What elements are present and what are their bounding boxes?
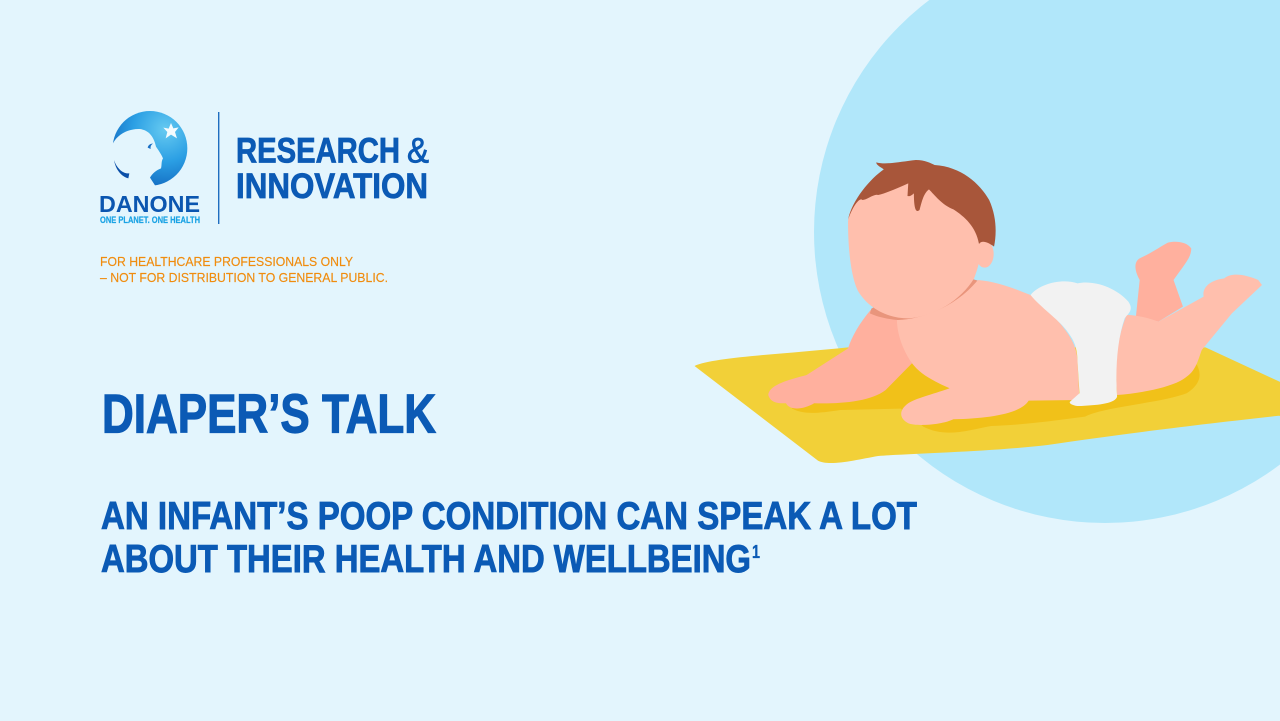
background circle: [814, 0, 1280, 523]
subtitle: [101, 495, 917, 581]
logo emblem: [105, 111, 187, 190]
yellow mat: [695, 347, 1280, 463]
mat shadow: [792, 363, 1200, 433]
far leg: [1135, 242, 1191, 322]
title: DIAPER’S TALK: [102, 382, 436, 444]
logo divider: [218, 112, 219, 224]
near leg: [1116, 275, 1262, 395]
heading: research and innovation: &: [407, 132, 429, 170]
Danone logo: [99, 111, 200, 225]
heading: research and innovation: RESEARCH: [236, 132, 400, 170]
disclaimer: FOR HEALTHCARE PROFESSIONALS ONLY: [100, 254, 353, 269]
illustration: baby on mat: [695, 160, 1280, 463]
logo wordmark: DANONE: [99, 191, 200, 217]
diaper: [1031, 281, 1131, 406]
heading: research and innovation: INNOVATION: [236, 167, 428, 206]
head: [848, 173, 980, 318]
subtitle: 1: [752, 542, 760, 562]
subtitle: ABOUT THEIR HEALTH AND WELLBEING: [101, 538, 751, 581]
logo tagline: ONE PLANET. ONE HEALTH: [100, 215, 200, 225]
subtitle: AN INFANT’S POOP CONDITION CAN SPEAK A LOT: [101, 495, 917, 538]
neck band: [870, 278, 978, 320]
disclaimer: – NOT FOR DISTRIBUTION TO GENERAL PUBLIC.: [100, 270, 388, 285]
heading: research and innovation: [236, 132, 429, 206]
disclaimer: [100, 254, 388, 285]
far arm: [768, 310, 912, 409]
torso and near arm: [897, 280, 1079, 425]
hair: [848, 160, 996, 247]
ear: [976, 240, 994, 268]
